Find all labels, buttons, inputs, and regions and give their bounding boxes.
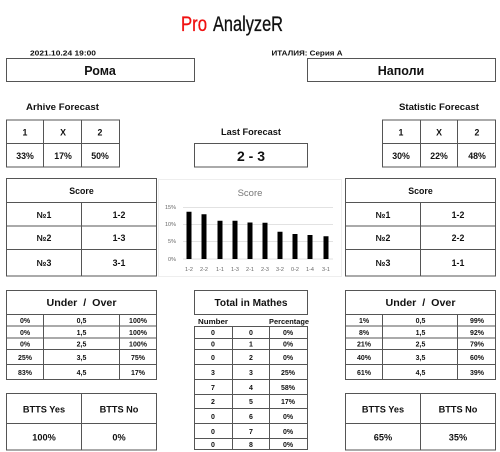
total in matches table: 5 <box>249 399 253 406</box>
right under/over table <box>346 290 496 380</box>
left under/over table: 83% <box>18 370 33 377</box>
total in matches table: 0 <box>211 429 215 436</box>
total in matches table: 58% <box>281 385 296 392</box>
left under/over table: 25% <box>18 355 33 362</box>
total in matches table: 3 <box>211 370 215 377</box>
total in matches table: 0% <box>283 330 294 337</box>
left under/over table: 17% <box>131 370 146 377</box>
archive forecast heading: Arhive Forecast <box>26 102 100 113</box>
archive forecast table <box>6 120 120 167</box>
total in matches table: 0 <box>249 330 253 337</box>
left score table: Score <box>69 186 94 196</box>
score bar chart: 1-4 <box>306 267 314 273</box>
score bar chart: 0% <box>168 257 176 263</box>
right BTTS table <box>346 394 496 450</box>
total in matches table: 17% <box>281 399 296 406</box>
right BTTS table: BTTS No <box>439 404 478 414</box>
right under/over table: 61% <box>357 370 372 377</box>
score bar chart <box>158 180 342 276</box>
away team box <box>308 58 496 82</box>
left under/over table: 2,5 <box>77 342 86 348</box>
right under/over table: 79% <box>470 342 485 348</box>
right score table: 2-2 <box>452 233 464 243</box>
left score table <box>6 178 156 276</box>
right under/over table: 8% <box>359 330 370 337</box>
right score table: 1-2 <box>452 210 464 220</box>
right score table: Score <box>408 186 433 196</box>
statistic forecast heading: Statistic Forecast <box>399 102 480 113</box>
score bar chart: 15% <box>165 205 176 211</box>
statistic forecast table: 2 <box>475 128 480 138</box>
total in matches table: 7 <box>249 429 253 436</box>
left under/over table: 4,5 <box>77 370 86 377</box>
left score table: 1-3 <box>113 233 125 243</box>
right under/over table: 1% <box>359 318 370 325</box>
right BTTS table: 35% <box>449 432 467 442</box>
right under/over table: 40% <box>357 355 372 362</box>
score bar chart: 2-3 <box>261 267 269 273</box>
left score table: №2 <box>37 233 51 243</box>
score bar chart: 1-1 <box>216 267 224 273</box>
right under/over table: 3,5 <box>416 355 425 362</box>
title <box>181 13 283 36</box>
total in matches table: 0% <box>283 429 294 436</box>
left score table: 3-1 <box>113 258 125 268</box>
total in matches table: 1 <box>249 342 253 348</box>
total in matches table: 0% <box>283 355 294 362</box>
left under/over table <box>6 290 156 380</box>
left under/over table: 100% <box>129 330 148 337</box>
left under/over table: 1,5 <box>77 330 86 337</box>
total in matches table: 0% <box>283 442 294 449</box>
statistic forecast table <box>382 120 496 167</box>
total column labels <box>198 317 309 326</box>
total in matches table: 0 <box>211 414 215 421</box>
right under/over table: 39% <box>470 370 485 377</box>
right score table: №1 <box>376 210 390 220</box>
total in matches table: 0 <box>211 342 215 348</box>
right under/over table: 92% <box>470 330 485 337</box>
total in matches heading box: Total in Mathes <box>214 298 288 309</box>
left BTTS table: BTTS Yes <box>23 404 65 414</box>
title: AnalyzeR <box>213 13 283 36</box>
right under/over table: 60% <box>470 355 485 362</box>
left under/over table: 0% <box>20 318 31 325</box>
statistic forecast table: 1 <box>399 128 404 138</box>
score bar chart: 2-2 <box>200 267 208 273</box>
archive forecast table: 33% <box>16 151 34 161</box>
right score table: №3 <box>376 258 390 268</box>
statistic forecast table: X <box>436 128 442 138</box>
left under/over table: 3,5 <box>77 355 86 362</box>
score bar chart: 3-2 <box>276 267 284 273</box>
left under/over table: 75% <box>131 355 146 362</box>
right under/over table: 0,5 <box>416 318 425 325</box>
title: Pro <box>181 13 207 36</box>
left BTTS table: BTTS No <box>100 404 139 414</box>
right BTTS table: 65% <box>374 432 392 442</box>
score bar chart: 3-1 <box>322 267 330 273</box>
right under/over table: Under / Over <box>386 298 456 309</box>
archive forecast table: 17% <box>54 151 72 161</box>
statistic forecast table: 30% <box>392 151 410 161</box>
right under/over table: 4,5 <box>416 370 425 377</box>
statistic forecast table: 48% <box>468 151 486 161</box>
total in matches table: 7 <box>211 385 215 392</box>
archive forecast table: 2 <box>98 128 103 138</box>
score bar chart: 2-1 <box>246 267 254 273</box>
total column labels: Number <box>198 317 228 326</box>
total in matches table: 0 <box>211 355 215 362</box>
left under/over table: 100% <box>129 342 148 348</box>
score bar chart: Score <box>238 188 262 199</box>
total in matches table: 0 <box>211 330 215 337</box>
score bar chart: 1-3 <box>231 267 239 273</box>
league name: ИТАЛИЯ: Серия А <box>272 48 343 58</box>
home team box: Рома <box>84 64 117 78</box>
last forecast box: 2 - 3 <box>237 148 265 164</box>
left under/over table: Under / Over <box>46 298 117 309</box>
right under/over table: 2,5 <box>416 342 425 348</box>
total in matches table: 0% <box>283 342 294 348</box>
last forecast heading: Last Forecast <box>221 127 281 137</box>
right score table: №2 <box>376 233 390 243</box>
left BTTS table <box>6 394 156 450</box>
total in matches table: 0% <box>283 414 294 421</box>
total in matches table: 25% <box>281 370 296 377</box>
total in matches table: 2 <box>211 399 215 406</box>
total in matches heading box <box>194 290 308 314</box>
archive forecast table: 50% <box>91 151 109 161</box>
left under/over table: 0% <box>20 330 31 337</box>
match date: 2021.10.24 19:00 <box>30 48 96 58</box>
away team box: Наполи <box>378 64 424 78</box>
total in matches table: 4 <box>249 385 253 392</box>
left score table: 1-2 <box>113 210 125 220</box>
total in matches table: 2 <box>249 355 253 362</box>
left score table: №1 <box>37 210 51 220</box>
total in matches table <box>194 326 308 450</box>
left under/over table: 0,5 <box>77 318 86 325</box>
statistic forecast table: 22% <box>430 151 448 161</box>
score bar chart: 0-2 <box>291 267 299 273</box>
right under/over table: 99% <box>470 318 485 325</box>
score bar chart: 1-2 <box>185 267 193 273</box>
left BTTS table: 0% <box>112 432 126 442</box>
score bar chart: 10% <box>165 222 176 228</box>
left under/over table: 100% <box>129 318 148 325</box>
total in matches table: 0 <box>211 442 215 449</box>
archive forecast table: X <box>60 128 66 138</box>
right under/over table: 21% <box>357 342 372 348</box>
right BTTS table: BTTS Yes <box>362 404 404 414</box>
left BTTS table: 100% <box>32 432 56 442</box>
total in matches table: 8 <box>249 442 253 449</box>
total column labels: Percentage <box>269 317 309 326</box>
home team box <box>6 58 194 82</box>
archive forecast table: 1 <box>23 128 28 138</box>
last forecast box <box>194 144 308 167</box>
total in matches table: 6 <box>249 414 253 421</box>
total in matches table: 3 <box>249 370 253 377</box>
right under/over table: 1,5 <box>416 330 425 337</box>
right score table <box>346 178 496 276</box>
score bar chart: 5% <box>168 239 176 245</box>
left score table: №3 <box>37 258 51 268</box>
right score table: 1-1 <box>452 258 464 268</box>
left under/over table: 0% <box>20 342 31 348</box>
